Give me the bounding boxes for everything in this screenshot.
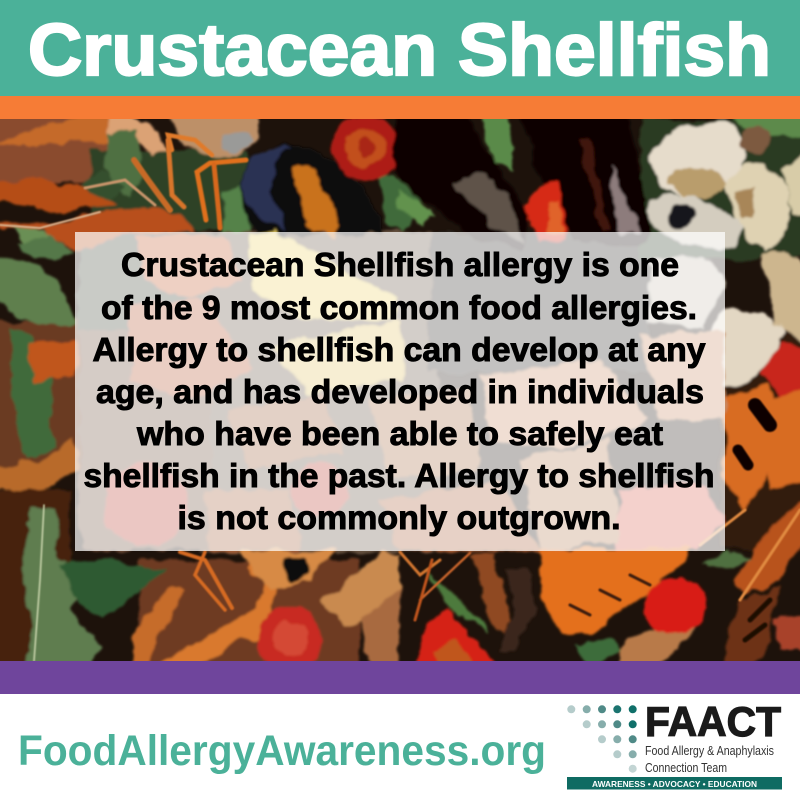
prawns (470, 552, 510, 635)
body text: shellfish in the past. Allergy to shellfish (84, 457, 714, 494)
body text: Allergy to shellfish can develop at any (92, 331, 706, 368)
logo dots (567, 705, 637, 773)
black mussels (392, 112, 530, 250)
body text: is not commonly outgrown. (178, 499, 620, 536)
body text (84, 246, 714, 536)
right prawn (735, 490, 800, 595)
purple band (0, 661, 800, 694)
translucent text panel (75, 232, 725, 551)
left crayfish (0, 438, 78, 492)
under-panel food (248, 232, 400, 320)
large clam right of panel (700, 309, 782, 385)
title: Crustacean Shellfish (28, 10, 771, 91)
photo: seafood platter (0, 110, 800, 673)
logo strapline bar (567, 777, 782, 790)
body text: of the 9 most common food allergies. (101, 289, 697, 326)
left crayfish claws (0, 178, 118, 212)
tomato wedge (525, 181, 565, 245)
body text: who have been able to safely eat (136, 415, 663, 452)
body text: Crustacean Shellfish allergy is one (121, 246, 679, 283)
FAACT logo: Connection Team (645, 760, 727, 775)
clams (650, 121, 748, 198)
red tomato (645, 577, 707, 633)
fine details (0, 135, 800, 661)
dark mussel (240, 145, 388, 236)
bottom crayfish (130, 587, 185, 668)
website url: FoodAllergyAwareness.org (18, 727, 546, 775)
top-left crayfish (0, 119, 111, 148)
wood and greens base (0, 110, 110, 182)
greens bottom (425, 570, 488, 632)
logo wordmark: FAACT (645, 698, 781, 745)
header band (0, 0, 800, 96)
FAACT logo: AWARENESS • ADVOCACY • EDUCATION (592, 779, 757, 789)
FAACT logo (567, 698, 782, 790)
orange band (0, 96, 800, 119)
green leaves (103, 130, 142, 198)
tomato wedge bottom (414, 606, 496, 661)
left arugula leaves (0, 257, 78, 326)
top tomato (332, 115, 398, 181)
body text: age, and has developed in individuals (96, 373, 704, 410)
bottom center tomato (256, 604, 324, 661)
logo tagline: Food Allergy & Anaphylaxis (645, 743, 774, 758)
